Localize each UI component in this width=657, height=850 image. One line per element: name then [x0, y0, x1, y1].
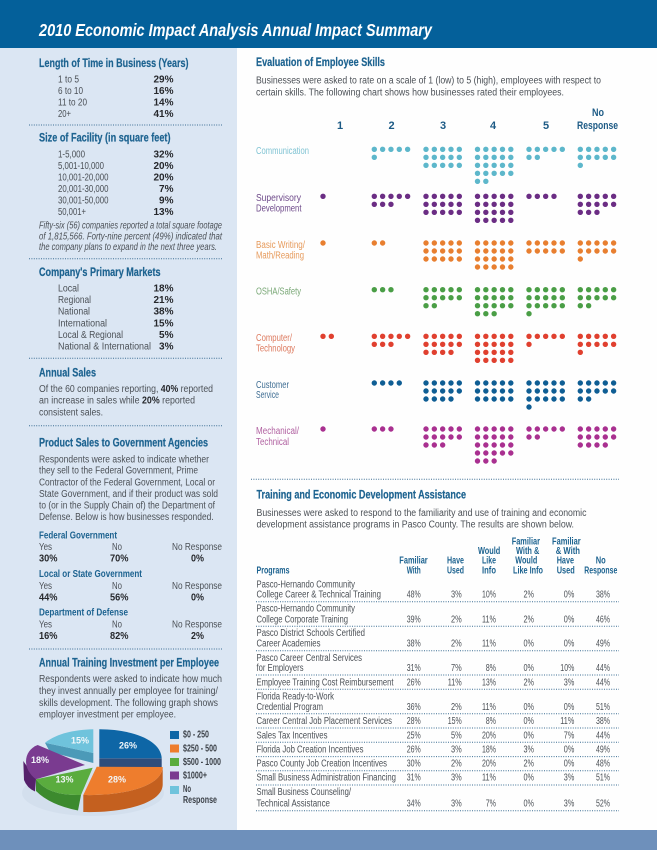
- text block: skills development. The following graph shows: [39, 698, 218, 709]
- row: mechanical technical: Technical: [256, 437, 289, 448]
- row: florida job creation incentives: Florida Job Creation Incentives: [256, 744, 364, 755]
- data list: 15%: [153, 318, 174, 329]
- row: PHCC corporate training: [256, 604, 610, 625]
- row: florida ready-to-work: 0%: [524, 702, 534, 713]
- text block: Respondents were asked to indicate whether: [39, 454, 210, 465]
- row: small business administration financing: 3%: [451, 773, 462, 784]
- slice labels: 18%: [31, 755, 49, 765]
- row: sales tax incentives: 7%: [564, 730, 574, 741]
- panel: training and economic development assistance: [256, 490, 619, 811]
- legend: [170, 730, 221, 806]
- department of defense results: No Response: [172, 620, 222, 631]
- row: employee training cost reimbursement: 2%: [524, 678, 534, 689]
- row: employee training cost reimbursement: 11%: [448, 678, 462, 689]
- row: PHCC career and technical training: 3%: [451, 590, 462, 601]
- table header: With &: [516, 546, 539, 557]
- row: employee training cost reimbursement: Employee Training Cost Reimbursement: [256, 678, 394, 689]
- table header: Used: [557, 565, 575, 576]
- text block: consistent sales.: [39, 407, 103, 418]
- left sidebar panel: [0, 48, 237, 830]
- row: florida job creation incentives: 3%: [451, 744, 462, 755]
- row: pasco county job creation incentives: 20%: [482, 759, 496, 770]
- row: PHCC career and technical training: 2%: [524, 590, 534, 601]
- row: florida job creation incentives: 0%: [564, 744, 574, 755]
- italic note: of 1,815,566. Forty-nine percent (49%) indicated that: [39, 232, 223, 242]
- row: career central services: 44%: [596, 663, 610, 674]
- table header: Like: [482, 556, 496, 567]
- legend: $1000+: [183, 770, 207, 782]
- row: customer service: Customer: [256, 380, 289, 391]
- federal government results: Federal Government: [39, 530, 118, 541]
- panel: primary markets: [39, 267, 174, 352]
- table header: Have: [447, 556, 464, 567]
- text block: Businesses were asked to respond to the familiarity and use of training and economic: [256, 508, 586, 519]
- data list: 21%: [153, 295, 174, 306]
- row: florida job creation incentives: [256, 744, 610, 755]
- data list: 20+: [58, 109, 71, 120]
- row: florida job creation incentives: 49%: [596, 744, 610, 755]
- data list: 20,001-30,000: [58, 184, 109, 195]
- row: basic writing, math, reading: [256, 240, 614, 267]
- federal government results: 30%: [39, 554, 58, 565]
- row: career central services: [256, 653, 610, 674]
- row: PHCC career and technical training: 10%: [482, 590, 496, 601]
- row: career central services: 10%: [560, 663, 574, 674]
- panel: size of facility: [39, 132, 223, 253]
- slice: purple 18%: [23, 745, 85, 792]
- heading: Evaluation of Employee Skills: [256, 57, 385, 69]
- rating column headers: No: [592, 107, 604, 119]
- row: pasco county job creation incentives: 0%: [564, 759, 574, 770]
- panel: evaluation of employee skills: [256, 57, 618, 461]
- table header: Familiar: [552, 536, 581, 547]
- row: computer technology: [256, 333, 614, 360]
- panel: annual sales: [39, 368, 213, 418]
- data list: 29%: [153, 74, 174, 85]
- heading: Training and Economic Development Assistance: [256, 490, 466, 502]
- row: pasco county job creation incentives: 48%: [596, 759, 610, 770]
- panel: length of time in business: [39, 58, 189, 120]
- data list: 9%: [159, 196, 174, 206]
- rating column headers: 5: [543, 120, 549, 132]
- row: career central services: Pasco Career Central Services: [256, 653, 362, 664]
- department of defense results: Department of Defense: [39, 608, 128, 619]
- text block: they sell to the Federal Government, Prime: [39, 466, 198, 477]
- table header: Have: [557, 556, 574, 567]
- row: employee training cost reimbursement: 13%: [482, 678, 496, 689]
- row: florida ready-to-work: Credential Program: [256, 702, 323, 713]
- row: career central services: for Employers: [256, 663, 304, 674]
- federal government results: Yes: [39, 542, 52, 553]
- row: small business administration financing: 51%: [596, 773, 610, 784]
- row: PHCC corporate training: 2%: [524, 614, 534, 625]
- data list: 20%: [153, 161, 174, 172]
- row: supervisory development: [256, 193, 614, 220]
- heading: Annual Training Investment per Employee: [39, 658, 219, 670]
- row: sales tax incentives: 44%: [596, 730, 610, 741]
- row: career central job placement: 38%: [596, 716, 610, 727]
- row: PHCC corporate training: 2%: [451, 614, 462, 625]
- row: career central job placement: 11%: [560, 716, 574, 727]
- row: district schools career academies: 11%: [482, 638, 496, 650]
- table header: Like Info: [513, 565, 543, 576]
- row: district schools career academies: 0%: [524, 638, 534, 650]
- data list: 41%: [153, 109, 174, 120]
- text block: Businesses were asked to rate on a scale of 1 (low) to 5 (high), employees with respect to: [256, 76, 601, 87]
- row: supervisory development: Development: [256, 204, 302, 214]
- table header: Familiar: [399, 556, 428, 567]
- data list: Local: [58, 284, 79, 295]
- data list: 1 to 5: [58, 74, 79, 85]
- department of defense results: [39, 608, 222, 642]
- row: employee training cost reimbursement: 26%: [407, 678, 421, 689]
- row: florida ready-to-work: 36%: [407, 702, 421, 713]
- slice: orange 28%: [83, 767, 163, 812]
- text block: [39, 454, 218, 523]
- table header: No: [596, 556, 606, 567]
- department of defense results: 2%: [191, 631, 204, 642]
- row: customer service: [256, 380, 614, 407]
- text block: Defense. Below is how businesses responded.: [39, 512, 214, 523]
- data list: Regional: [58, 295, 91, 306]
- local or state government results: No Response: [172, 581, 222, 592]
- federal government results: No Response: [172, 542, 222, 553]
- row: small business counseling: 3%: [451, 799, 462, 810]
- department of defense results: 16%: [39, 631, 58, 642]
- rating column headers: 3: [440, 120, 446, 132]
- slice labels: [31, 736, 137, 784]
- table header: Info: [482, 565, 496, 576]
- text block: Contractor of the Federal Government, Local or: [39, 477, 216, 488]
- row: PHCC corporate training: 0%: [564, 614, 574, 625]
- data list: 38%: [153, 307, 174, 318]
- row: communication: [256, 146, 614, 181]
- row: OSHA safety: [256, 286, 614, 314]
- row: PHCC career and technical training: 0%: [564, 590, 574, 601]
- row: district schools career academies: Pasco District Schools Certified: [256, 628, 365, 639]
- table header: Programs: [256, 565, 290, 576]
- department of defense results: 82%: [110, 631, 129, 642]
- table header: Used: [447, 565, 464, 576]
- local or state government results: No: [112, 581, 122, 592]
- title: 2010 Economic Impact Analysis Annual Impact Summary: [38, 20, 433, 40]
- heading: Product Sales to Government Agencies: [39, 438, 208, 450]
- text block: certain skills. The following chart shows how businesses rated their employees.: [256, 87, 564, 98]
- italic note: Fifty-six (56) companies reported a total square footage: [39, 220, 222, 232]
- heading: Length of Time in Business (Years): [39, 58, 189, 70]
- text block: [39, 674, 222, 720]
- row: career central services: 7%: [451, 663, 462, 674]
- row: small business counseling: 52%: [596, 799, 610, 810]
- row: career central job placement: Career Central Job Placement Services: [256, 716, 392, 727]
- federal government results: No: [112, 542, 122, 553]
- row: PHCC career and technical training: College Career & Technical Training: [256, 590, 381, 601]
- local or state government results: Yes: [39, 581, 52, 592]
- table header: Response: [584, 565, 618, 576]
- row: small business counseling: 0%: [524, 799, 534, 810]
- table header: & With: [556, 546, 580, 557]
- table header: Would: [478, 546, 500, 557]
- row: small business counseling: Technical Assistance: [256, 799, 330, 810]
- row: career central services: 8%: [486, 663, 496, 674]
- row: career central job placement: [256, 716, 610, 727]
- slice: light blue 15%: [45, 729, 93, 763]
- row: small business administration financing: 0%: [524, 773, 534, 784]
- row: customer service: Service: [256, 390, 279, 401]
- row: florida ready-to-work: 51%: [596, 702, 610, 713]
- row: florida job creation incentives: 26%: [407, 744, 421, 755]
- slice labels: 26%: [119, 740, 137, 750]
- text block: development assistance programs in Pasco County. The results are shown below.: [256, 520, 574, 531]
- rating column headers: 2: [388, 120, 395, 132]
- row: communication: Communication: [256, 146, 309, 157]
- row: mechanical technical: [256, 426, 614, 461]
- row: career central services: 0%: [524, 663, 534, 674]
- local or state government results: 0%: [191, 592, 204, 603]
- row: career central job placement: 8%: [486, 716, 496, 727]
- slice: blue 26%: [99, 729, 162, 768]
- row: florida ready-to-work: 0%: [564, 702, 574, 713]
- data list: 7%: [159, 184, 174, 195]
- row: small business administration financing: [256, 773, 610, 784]
- row: career central services: 31%: [407, 663, 421, 674]
- row: pasco county job creation incentives: [256, 759, 610, 770]
- data list: National: [58, 307, 90, 318]
- legend: $250 - 500: [183, 744, 217, 754]
- rating column headers: 4: [490, 120, 497, 132]
- rating column headers: [337, 107, 618, 132]
- row: district schools career academies: 49%: [596, 638, 610, 650]
- row: PHCC career and technical training: Pasco-Hernando Community: [256, 580, 355, 590]
- row: career central job placement: 28%: [407, 716, 421, 727]
- row: small business counseling: 7%: [486, 799, 496, 810]
- legend: Response: [183, 795, 217, 806]
- rating column headers: 1: [337, 120, 343, 132]
- pie chart: [22, 729, 164, 816]
- row: small business counseling: 34%: [407, 799, 421, 810]
- row: PHCC corporate training: 11%: [482, 614, 496, 625]
- legend: $0 - 250: [183, 730, 209, 740]
- row: sales tax incentives: 25%: [407, 730, 421, 741]
- row: career central job placement: 15%: [448, 716, 462, 727]
- row: district schools career academies: [256, 628, 610, 650]
- text block: [256, 508, 586, 531]
- data list: 5%: [159, 330, 174, 341]
- row: sales tax incentives: 5%: [451, 730, 462, 741]
- local or state government results: Local or State Government: [39, 569, 143, 580]
- row: pasco county job creation incentives: 2%: [451, 759, 462, 770]
- table header: Would: [515, 556, 537, 567]
- data list: [58, 284, 174, 352]
- text block: [256, 76, 601, 98]
- row: district schools career academies: 2%: [451, 638, 462, 650]
- row: supervisory development: Supervisory: [256, 193, 301, 204]
- row: florida ready-to-work: 2%: [451, 702, 462, 713]
- row: florida ready-to-work: [256, 691, 610, 713]
- heading: Size of Facility (in square feet): [39, 132, 171, 144]
- row: mechanical technical: Mechanical/: [256, 426, 299, 437]
- data list: 1-5,000: [58, 149, 85, 160]
- row: computer technology: Computer/: [256, 333, 292, 344]
- row: small business counseling: Small Business Counseling/: [256, 787, 351, 798]
- heading: Annual Sales: [39, 368, 96, 380]
- row: small business administration financing: 31%: [407, 773, 421, 784]
- local or state government results: [39, 569, 222, 603]
- row: employee training cost reimbursement: [256, 678, 610, 689]
- text block: Of the 60 companies reporting, 40% reported: [39, 384, 213, 395]
- data list: 18%: [153, 284, 174, 295]
- panel: annual training investment: [22, 658, 222, 816]
- text block: [39, 384, 213, 418]
- department of defense results: No: [112, 620, 122, 631]
- data list: 6 to 10: [58, 86, 83, 97]
- row: PHCC corporate training: 46%: [596, 614, 610, 625]
- heading: Company's Primary Markets: [39, 267, 160, 279]
- data list: Local & Regional: [58, 330, 123, 341]
- text block: Respondents were asked to indicate how much: [39, 674, 222, 685]
- row: sales tax incentives: 20%: [482, 730, 496, 741]
- row: pasco county job creation incentives: 30%: [407, 759, 421, 770]
- row: PHCC corporate training: Pasco-Hernando Community: [256, 604, 355, 615]
- data list: 3%: [159, 341, 174, 352]
- row: district schools career academies: 38%: [407, 638, 421, 650]
- header banner: [0, 0, 657, 48]
- row: florida ready-to-work: 11%: [482, 702, 496, 713]
- data list: 16%: [153, 86, 174, 97]
- row: sales tax incentives: 0%: [524, 730, 534, 741]
- data list: 50,001+: [58, 207, 86, 218]
- row: pasco county job creation incentives: Pasco County Job Creation Incentives: [256, 759, 387, 770]
- local or state government results: 56%: [110, 592, 129, 603]
- panel: product sales to government agencies: [39, 438, 222, 642]
- row: small business administration financing: Small Business Administration Financing: [256, 773, 396, 784]
- row: sales tax incentives: Sales Tax Incentives: [256, 730, 328, 741]
- row: PHCC corporate training: 39%: [407, 614, 421, 625]
- row: PHCC career and technical training: 38%: [596, 590, 610, 601]
- table header: With: [407, 565, 421, 576]
- text block: they invest annually per employee for training/: [39, 686, 218, 697]
- federal government results: 70%: [110, 554, 129, 565]
- data list: National & International: [58, 341, 151, 352]
- row: florida job creation incentives: 3%: [524, 744, 534, 755]
- table header: [256, 536, 618, 576]
- row: PHCC career and technical training: 48%: [407, 590, 421, 601]
- row: small business counseling: 3%: [564, 799, 574, 810]
- data list: 32%: [153, 149, 174, 160]
- table header: Familiar: [512, 536, 540, 547]
- row: small business administration financing: 11%: [482, 773, 496, 784]
- rating column headers: Response: [577, 120, 618, 132]
- local or state government results: 44%: [39, 592, 58, 603]
- row: district schools career academies: 0%: [564, 638, 574, 650]
- federal government results: [39, 530, 222, 565]
- row: florida job creation incentives: 18%: [482, 744, 496, 755]
- department of defense results: Yes: [39, 620, 52, 631]
- legend: No: [183, 784, 191, 795]
- row: employee training cost reimbursement: 3%: [564, 678, 574, 689]
- data list: 10,001-20,000: [58, 172, 109, 183]
- slice labels: 13%: [55, 774, 74, 784]
- text block: employer investment per employee.: [39, 710, 176, 720]
- data list: 20%: [153, 172, 174, 183]
- legend: $500 - 1000: [183, 757, 221, 768]
- row: pasco county job creation incentives: 2%: [524, 759, 534, 770]
- row: basic writing, math, reading: Basic Writing/: [256, 240, 305, 251]
- data list: 5,001-10,000: [58, 161, 104, 172]
- data list: 11 to 20: [58, 97, 87, 108]
- italic note: the company plans to expand in the next three years.: [39, 242, 217, 253]
- text block: to (or in the Supply Chain of) the Department of: [39, 500, 215, 511]
- row: florida ready-to-work: Florida Ready-to-Work: [256, 691, 335, 702]
- text block: an increase in sales while 20% reported: [39, 396, 195, 407]
- row: small business administration financing: 3%: [564, 773, 574, 784]
- row: career central job placement: 0%: [524, 716, 534, 727]
- row: basic writing, math, reading: Math/Reading: [256, 250, 304, 262]
- row: computer technology: Technology: [256, 344, 295, 354]
- slice labels: 28%: [108, 774, 126, 784]
- row: OSHA safety: OSHA/Safety: [256, 286, 301, 298]
- data list: 13%: [153, 207, 174, 218]
- italic note: [39, 220, 223, 253]
- row: sales tax incentives: [256, 730, 610, 741]
- row: PHCC corporate training: College Corporate Training: [256, 614, 348, 625]
- data list: 14%: [153, 97, 174, 108]
- footer band: [0, 830, 657, 850]
- data list: 30,001-50,000: [58, 196, 109, 206]
- data list: [58, 74, 174, 120]
- row: employee training cost reimbursement: 44%: [596, 678, 610, 689]
- federal government results: 0%: [191, 554, 204, 565]
- slice labels: 15%: [71, 736, 89, 746]
- row: small business counseling: [256, 787, 610, 810]
- slice: green 13%: [36, 768, 93, 810]
- data list: International: [58, 318, 107, 329]
- row: district schools career academies: Career Academies: [256, 638, 320, 650]
- data list: [58, 149, 174, 218]
- text block: State Government, and if their product was sold: [39, 489, 218, 500]
- row: PHCC career and technical training: [256, 580, 610, 601]
